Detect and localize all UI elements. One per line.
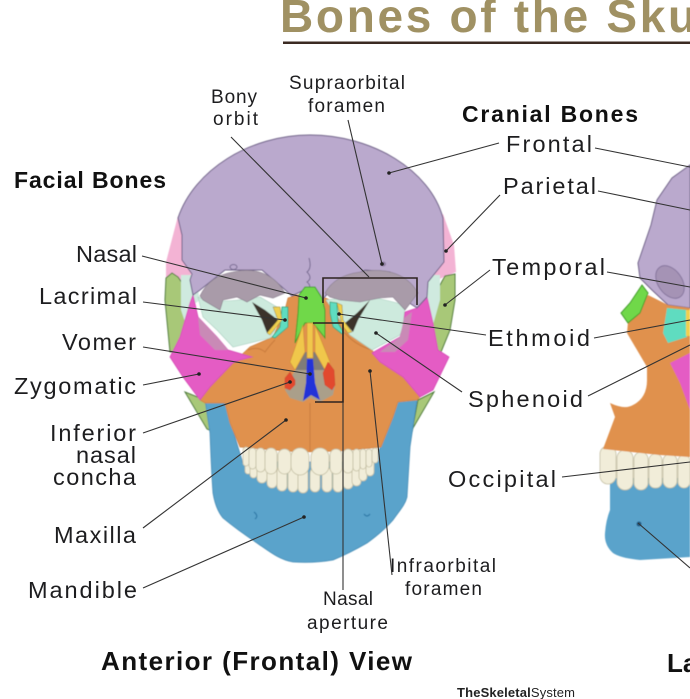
line end dots: [197, 171, 448, 519]
label: parietal: Parietal: [503, 173, 596, 199]
lines: facial: [142, 256, 392, 590]
label: nasal aperture: Nasal: [323, 589, 373, 610]
lateral mental foramen: [636, 522, 642, 526]
label: bony orbit: orbit: [213, 109, 259, 130]
orbital roofs: [200, 270, 418, 310]
lateral ethmoid: [663, 308, 687, 343]
supraorbital foramen right: [380, 262, 386, 266]
label: mandible: Mandible: [28, 577, 137, 603]
zygomatic inner shading: [198, 312, 412, 352]
parietal bone: [166, 214, 456, 285]
lateral parietal and frontal: [638, 165, 690, 308]
orbits: [198, 295, 405, 350]
label: temporal: Temporal: [492, 254, 605, 280]
label: frontal: Frontal: [506, 131, 592, 157]
maxilla: [200, 295, 420, 452]
nasal bone: [295, 287, 325, 343]
vomer: [303, 359, 320, 401]
heading: cranial bones: Cranial Bones: [462, 101, 638, 127]
label: bony orbit: Bony: [211, 87, 258, 108]
label: infraorbital foramen: foramen: [405, 579, 482, 600]
label: inferior nasal concha: [50, 420, 137, 490]
label: supraorbital foramen: Supraorbital: [289, 73, 405, 94]
label: inferior nasal concha: nasal: [76, 442, 136, 468]
lacrimal bone: [267, 303, 352, 335]
mental foramina: [254, 512, 370, 519]
lateral orbit depression: [650, 260, 690, 304]
mandible: [205, 400, 417, 562]
label: bony orbit: [211, 87, 259, 130]
label: nasal aperture: aperture: [307, 613, 388, 634]
frontal bone: [178, 135, 444, 308]
ethmoid wedges: [290, 323, 330, 370]
label: lacrimal: Lacrimal: [39, 283, 137, 309]
lateral temporal: [621, 285, 648, 323]
lateral lacrimal: [686, 310, 690, 336]
supraorbital foramen left: [230, 264, 237, 270]
maxilla shading: [248, 333, 372, 452]
label: nasal aperture: [307, 589, 388, 634]
zygomatic bone: [170, 295, 449, 400]
label: vomer: Vomer: [62, 329, 136, 355]
label: inferior nasal concha: concha: [53, 464, 137, 490]
label: occipital: Occipital: [448, 466, 556, 492]
lateral orbit background: [181, 275, 440, 325]
lateral mandible: [605, 478, 690, 560]
lower teeth: [245, 458, 374, 493]
lateral skull illustration: [600, 165, 690, 560]
label: infraorbital foramen: Infraorbital: [390, 556, 496, 577]
temporal bone: [165, 273, 455, 432]
lateral zygomatic: [670, 353, 690, 410]
title underline: [283, 42, 690, 44]
right fissure: [345, 300, 370, 332]
label: maxilla: Maxilla: [54, 522, 137, 548]
label: zygomatic: Zygomatic: [14, 373, 136, 399]
nasal aperture highlight box: [313, 323, 343, 402]
label: nasal: Nasal: [76, 241, 137, 267]
heading: facial bones: Facial Bones: [14, 167, 166, 193]
left fissure: [252, 302, 278, 333]
label: supraorbital foramen: [289, 73, 405, 117]
lateral teeth: [600, 446, 690, 490]
frontonasal suture: [307, 258, 310, 291]
orbit highlight box: [323, 278, 417, 305]
label: sphenoid: Sphenoid: [468, 386, 583, 412]
inferior nasal concha: [285, 362, 335, 390]
label: inferior nasal concha: Inferior: [50, 420, 136, 446]
lines: cranial: [231, 120, 690, 568]
nasal aperture: [285, 352, 335, 402]
upper nasal cavity: [295, 352, 325, 370]
leader lines: [142, 120, 690, 590]
caption: anterior view: Anterior (Frontal) View: [101, 646, 413, 676]
label: ethmoid: Ethmoid: [488, 325, 590, 351]
anterior skull illustration: [165, 135, 456, 562]
label: infraorbital foramen: [390, 556, 496, 600]
ethmoid bone: [272, 302, 344, 338]
label: supraorbital foramen: foramen: [308, 96, 385, 117]
upper teeth: [243, 447, 378, 475]
lateral maxilla: [603, 295, 690, 457]
